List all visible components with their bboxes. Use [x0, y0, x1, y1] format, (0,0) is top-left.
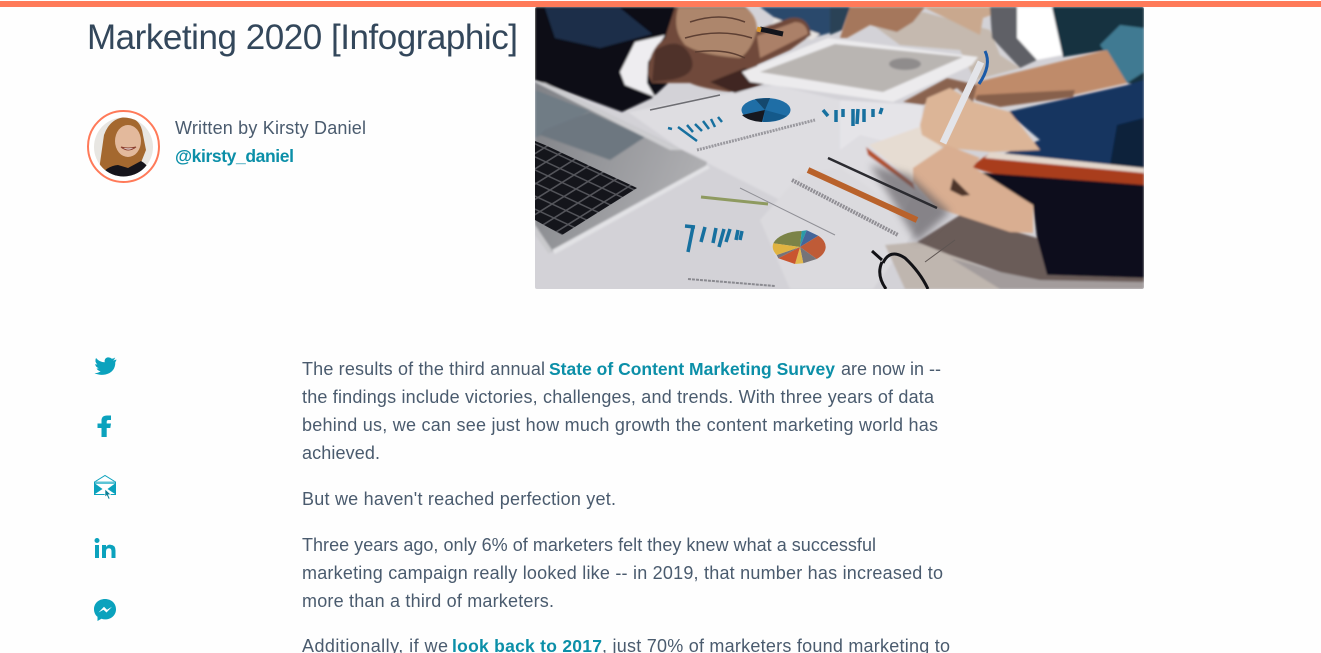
paragraph 4: [302, 636, 950, 653]
pie chart: colourful: [773, 230, 826, 264]
top accent bar: [0, 1, 1321, 7]
tablet: [742, 38, 978, 102]
pie chart: blue: [742, 98, 790, 122]
icon: linkedin: [94, 538, 116, 558]
hero photo: hands over marketing charts: [530, 7, 1144, 289]
author byline: Written by Kirsty Daniel: [175, 118, 366, 138]
table shadow: [870, 165, 950, 242]
hand creases: [685, 17, 752, 58]
paragraph 3: more than a third of marketers.: [302, 591, 554, 611]
paragraph 1: achieved.: [302, 443, 380, 463]
pen and stripes: [650, 29, 987, 286]
title: Marketing 2020 [Infographic]: [87, 18, 518, 57]
bar charts: [668, 108, 882, 252]
paragraph 1: The results of the third annual: [302, 359, 545, 379]
blue shirt arm: [1052, 7, 1144, 85]
paragraph 1: State of Content Marketing Survey: [549, 359, 835, 379]
icon: facebook: [98, 416, 111, 437]
papers and table: [626, 86, 915, 200]
paragraph 1: [302, 359, 941, 463]
notebook: [870, 127, 941, 178]
icon: messenger: [94, 599, 116, 621]
icon: email envelope: [94, 476, 116, 499]
paragraph 2: But we haven't reached perfection yet.: [302, 489, 616, 509]
paragraph 3: [302, 535, 943, 611]
paragraph 3: marketing campaign really looked like -- in 2019, that number has increased to: [302, 563, 943, 583]
eyeglasses: [872, 251, 928, 289]
author handle: @kirsty_daniel: [175, 146, 294, 166]
keyboard: [535, 141, 637, 235]
top background: [873, 12, 1020, 80]
suit and hand: [535, 7, 676, 114]
share icons: [94, 357, 116, 621]
paragraph 1: behind us, we can see just how much growth the content marketing world has: [302, 415, 938, 435]
writing hands: [920, 88, 1040, 152]
article body text: [302, 359, 950, 653]
paragraph 3: Three years ago, only 6% of marketers felt they knew what a successful: [302, 535, 876, 555]
laptop: [535, 82, 707, 252]
paragraph 1: the findings include victories, challenges, and trends. With three years of data: [302, 387, 935, 407]
icon: twitter: [94, 357, 116, 375]
paragraph 1: are now in --: [841, 359, 941, 379]
pointing hand: [840, 7, 925, 38]
dark lap: [973, 172, 1144, 278]
author block: [88, 111, 366, 182]
author avatar: [88, 111, 159, 182]
